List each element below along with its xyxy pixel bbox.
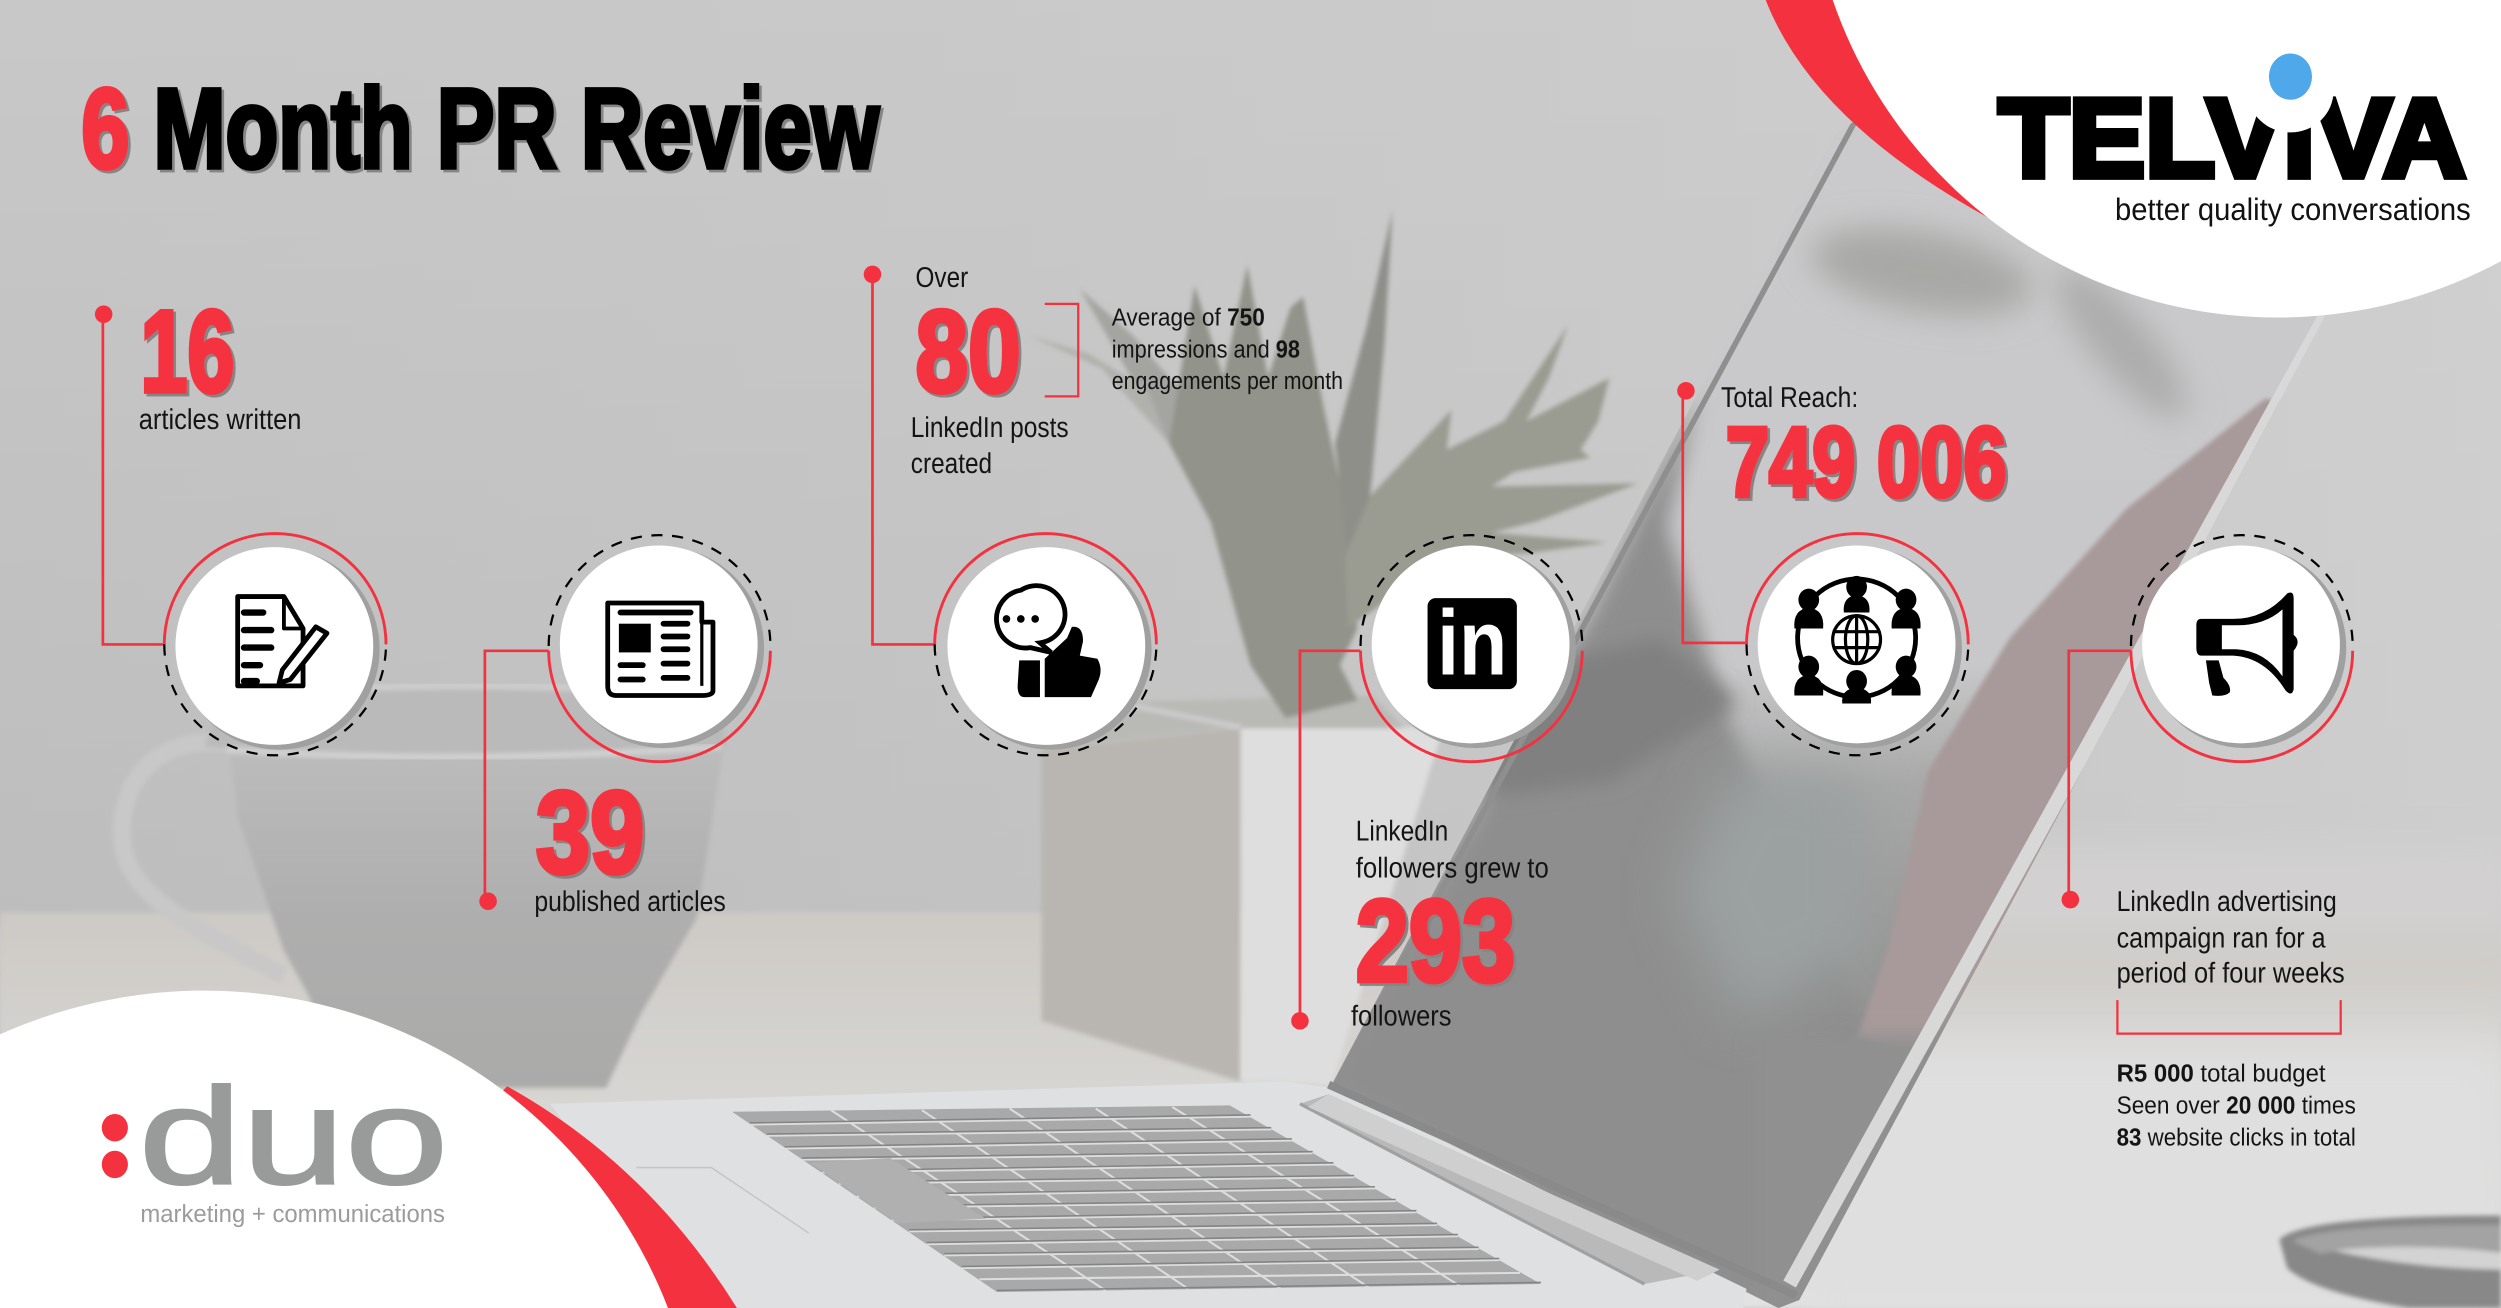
duo logo dots bbox=[102, 1114, 128, 1178]
logo dot bbox=[2269, 53, 2312, 100]
icon node: megaphone bbox=[2131, 535, 2353, 762]
stat: 39 published articles: published articles bbox=[534, 885, 726, 917]
icon node: global network bbox=[1747, 534, 1968, 755]
corner panel: Duo logo bbox=[0, 991, 737, 1308]
stat: LinkedIn advertising campaign: LinkedIn advertising bbox=[2117, 885, 2337, 917]
lens cap on desk bbox=[2279, 1215, 2501, 1308]
stat: 16 articles written bbox=[139, 288, 301, 435]
icon: globe and people bbox=[1794, 576, 1921, 703]
stat: over 80 LinkedIn posts: LinkedIn posts bbox=[911, 412, 1069, 443]
title: 6 Month PR Review bbox=[81, 67, 880, 193]
stat: over 80 LinkedIn posts: Over bbox=[916, 262, 968, 294]
stat: LinkedIn advertising campaign: period of four weeks bbox=[2117, 957, 2345, 989]
laptop keyboard bbox=[732, 1105, 1541, 1292]
logo wordmark: TELVIVA bbox=[1999, 76, 2466, 200]
stat: LinkedIn advertising campaign: Seen over 20 000 times bbox=[2117, 1093, 2356, 1120]
stat: over 80 LinkedIn posts: impressions and 98 bbox=[1112, 337, 1300, 364]
stat: 39 published articles bbox=[534, 769, 726, 917]
icon node: LinkedIn bbox=[1361, 535, 1582, 762]
stat: LinkedIn followers grew to 293: LinkedIn bbox=[1356, 815, 1448, 847]
stat: over 80 LinkedIn posts: engagements per month bbox=[1112, 368, 1343, 396]
laptop base bbox=[550, 1081, 1796, 1308]
icon node: newspaper bbox=[549, 535, 770, 762]
planter bbox=[1042, 695, 1443, 1085]
stat: 16 articles written: 16 bbox=[140, 288, 234, 417]
icon node: chat bubble and thumbs up bbox=[935, 534, 1156, 755]
stat: over 80 LinkedIn posts: 80 bbox=[916, 288, 1021, 417]
icon: megaphone bbox=[2196, 592, 2298, 696]
plant bbox=[1027, 211, 1638, 718]
stat: over 80 LinkedIn posts bbox=[911, 262, 1343, 479]
laptop screen bbox=[1333, 122, 2325, 1308]
stat: over 80 LinkedIn posts: Average of 750 bbox=[1112, 305, 1265, 332]
icon: LinkedIn badge: in bbox=[1437, 592, 1507, 695]
corner panel: Telviva logo bbox=[1766, 0, 2501, 318]
icon: chat and thumb bbox=[996, 586, 1101, 697]
connector lines and dots bbox=[95, 266, 2131, 1030]
cup bbox=[122, 686, 727, 1088]
stat: 16 articles written: articles written bbox=[139, 404, 301, 435]
logo tagline: better quality conversations bbox=[2115, 193, 2471, 228]
stat: LinkedIn advertising campaign: R5 000 total budget bbox=[2117, 1061, 2327, 1088]
stat: LinkedIn advertising campaign: campaign ran for a bbox=[2117, 922, 2327, 954]
duo tagline: marketing + communications bbox=[140, 1201, 445, 1228]
stat: LinkedIn followers grew to 293 bbox=[1351, 815, 1549, 1032]
stat: LinkedIn advertising campaign: 83 website clicks in total bbox=[2117, 1125, 2356, 1152]
stat: total reach 749 006: Total Reach: bbox=[1721, 381, 1858, 413]
stat: 39 published articles: 39 bbox=[536, 769, 644, 898]
duo wordmark: duo bbox=[139, 1061, 448, 1214]
stat: LinkedIn advertising campaign bbox=[2117, 885, 2356, 1152]
icon node: document and pen bbox=[164, 534, 386, 755]
stat: over 80 LinkedIn posts: created bbox=[911, 447, 992, 479]
stat: LinkedIn followers grew to 293: followers bbox=[1351, 1000, 1451, 1032]
stat: LinkedIn followers grew to 293: 293 bbox=[1356, 877, 1515, 1007]
stat: LinkedIn followers grew to 293: followers grew to bbox=[1356, 852, 1549, 884]
icon: newspaper bbox=[608, 603, 713, 695]
stat: total reach 749 006 bbox=[1721, 381, 2007, 518]
stat: total reach 749 006: 749 006 bbox=[1726, 408, 2007, 518]
icon: document bbox=[238, 597, 327, 686]
